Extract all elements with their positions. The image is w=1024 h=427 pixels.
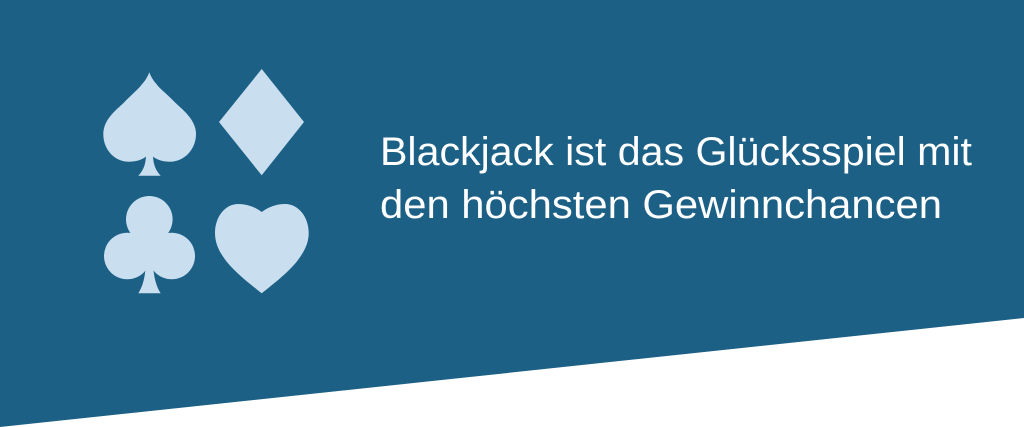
icon: heart xyxy=(215,204,309,293)
heading text xyxy=(380,130,972,227)
icon: diamond xyxy=(219,69,304,175)
icon group: card suits xyxy=(103,69,309,293)
icon: club xyxy=(104,196,195,293)
heading line 2: den höchsten Gewinnchancen xyxy=(380,183,942,227)
heading line 1: Blackjack ist das Glücksspiel mit xyxy=(380,130,972,174)
icon: spade xyxy=(103,72,196,176)
